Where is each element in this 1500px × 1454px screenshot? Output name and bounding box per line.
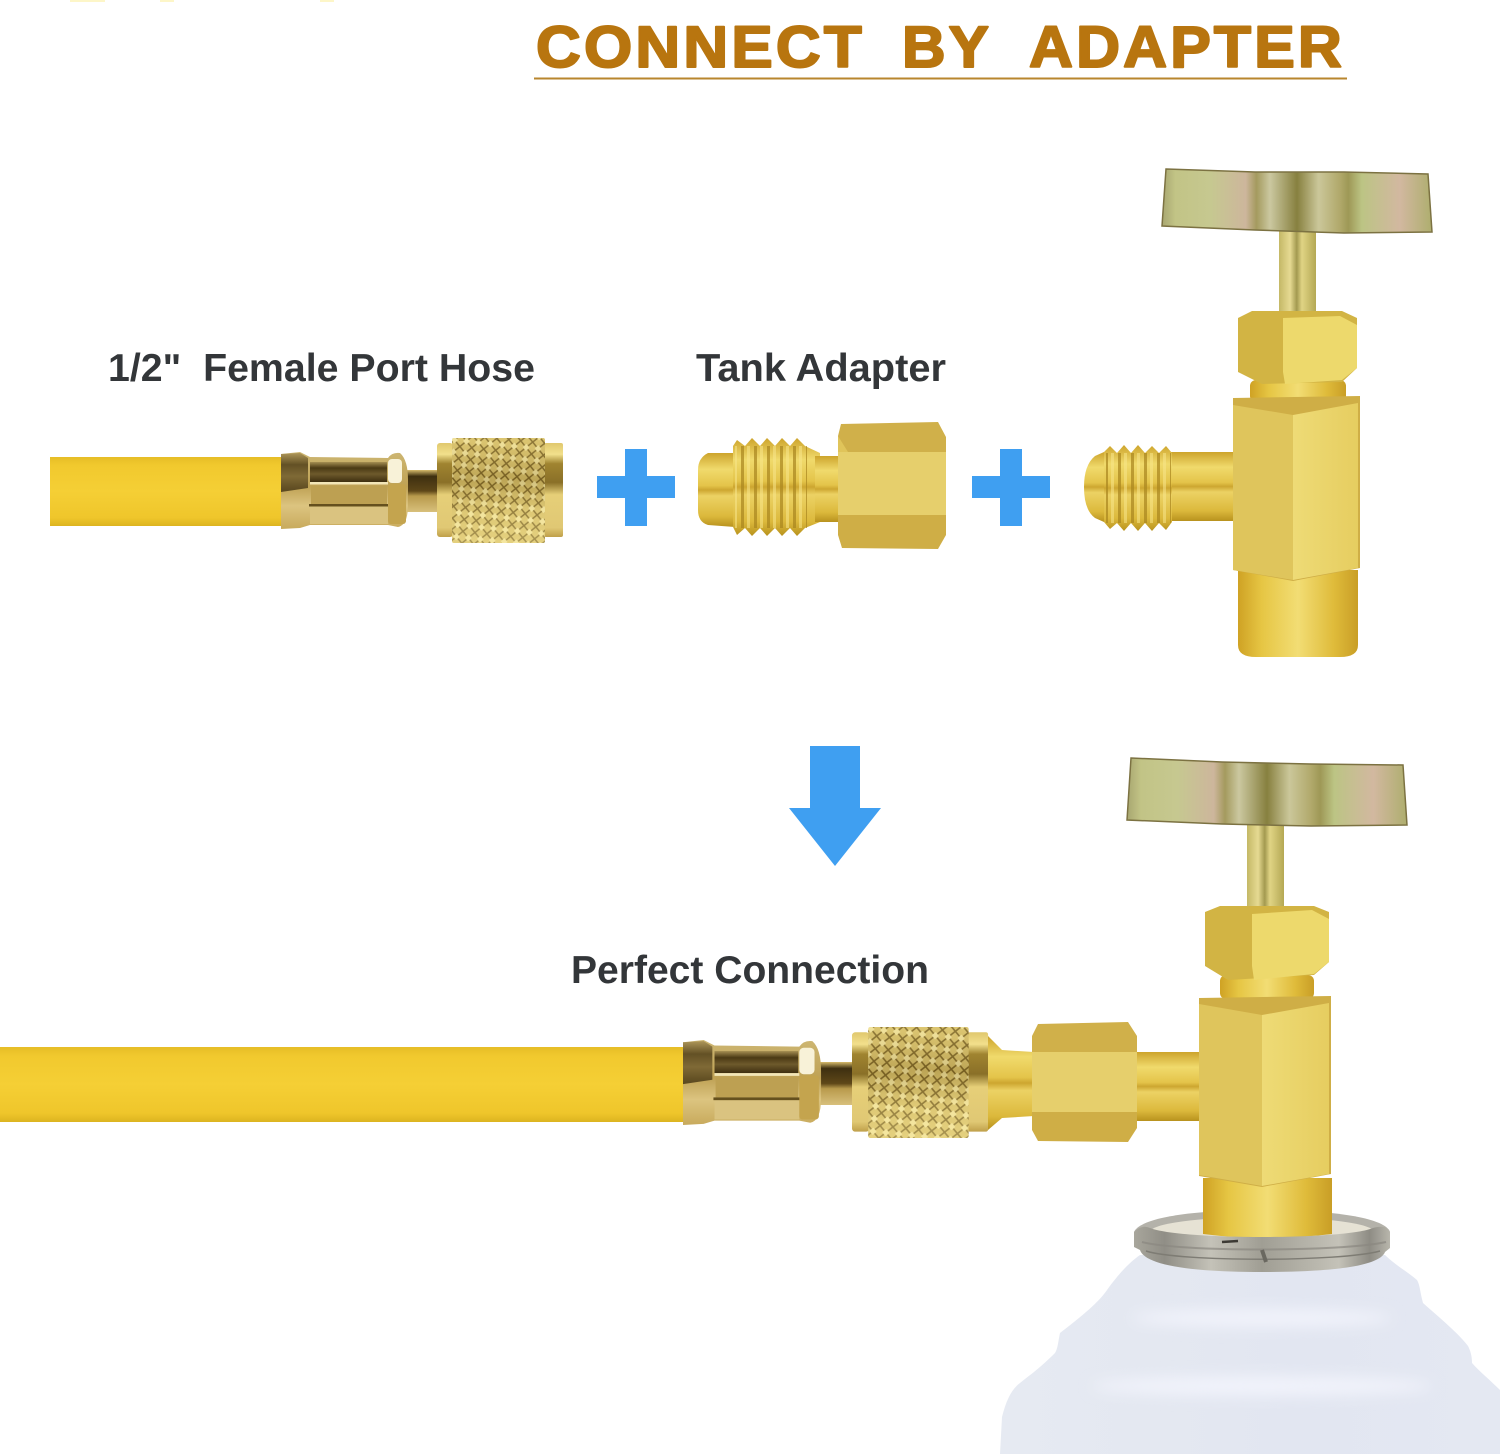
nose — [698, 453, 735, 527]
lower cylinder — [1238, 570, 1358, 657]
valve thread — [1104, 445, 1172, 531]
bottom cylinder — [1203, 1178, 1332, 1238]
label: perfect connection: Perfect Connection — [571, 949, 929, 992]
title: ADAPTER — [1029, 15, 1345, 80]
valve body — [1199, 996, 1331, 1187]
faint top edge marks — [70, 0, 334, 2]
T handle — [1127, 758, 1407, 826]
yellow hose — [50, 457, 282, 526]
stem — [1279, 230, 1316, 316]
packing nut — [1238, 311, 1357, 384]
down arrow — [789, 746, 881, 866]
knurled nut — [437, 438, 563, 543]
neck — [1250, 380, 1346, 402]
stem — [1247, 822, 1284, 910]
title: CONNECT — [536, 15, 865, 80]
top valve — [1084, 169, 1432, 657]
tank adapter part — [698, 422, 946, 549]
neck — [1220, 975, 1314, 999]
refrigerant bottle — [1000, 1255, 1500, 1454]
plus sign two — [972, 449, 1050, 526]
plus sign one — [597, 449, 675, 526]
metal ring front — [1134, 1227, 1390, 1272]
thread — [733, 438, 820, 536]
title — [534, 15, 1347, 80]
side arm — [1165, 452, 1235, 521]
packing nut — [1205, 906, 1329, 980]
T handle — [1162, 169, 1432, 233]
long hose — [0, 1047, 684, 1122]
adapter neck — [988, 1036, 1034, 1130]
top hose assembly — [50, 438, 563, 543]
side arm — [1134, 1052, 1202, 1121]
connected assembly on bottle — [0, 758, 1500, 1454]
title: BY — [902, 15, 992, 80]
adapter hex — [1032, 1022, 1137, 1142]
label: hose: 1/2" Female Port Hose — [108, 347, 535, 390]
stem — [405, 470, 439, 512]
metal ring back — [1134, 1210, 1390, 1262]
hex nut — [838, 422, 946, 549]
knurled nut — [852, 1027, 988, 1138]
label: tank adapter: Tank Adapter — [696, 347, 946, 390]
crimp ferrule — [281, 452, 408, 529]
neck — [815, 456, 845, 522]
ferrule — [683, 1040, 821, 1125]
stem — [818, 1062, 854, 1105]
valve body — [1233, 396, 1360, 581]
